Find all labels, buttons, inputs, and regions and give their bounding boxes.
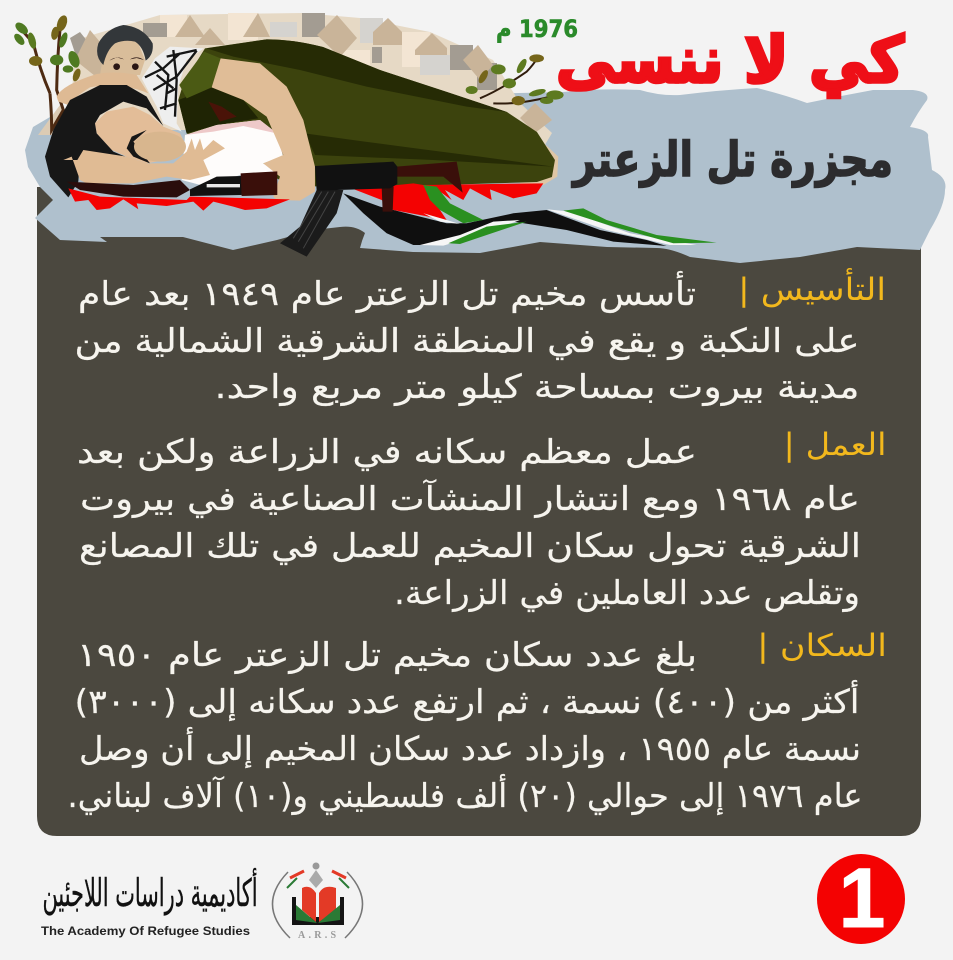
page number badge: 1 [839,851,885,945]
logo: ARS emblem [272,862,363,941]
illustration: flag white upper [547,209,697,245]
logo: ARS emblem: A.R.S [298,930,336,941]
illustration: blood on shirt [208,102,237,122]
illustration: keffiyeh [142,47,204,132]
illustration: rifle grip [382,187,394,212]
illustration: woman's dark skirt [67,180,190,197]
illustration: woman's face [95,107,185,163]
illustration: dress [182,120,283,187]
text block: work line 2: عام ١٩٦٨ ومع انتشار المنشآت الصناعية في بيروت [80,479,860,518]
text block: population line 4: عام ١٩٧٦ إلى حوالي (٢٠) ألف فلسطيني و(١٠) آلاف لبناني. [68,774,862,816]
illustration: flag white lower [420,213,520,246]
panel: dark content background [37,187,921,836]
section: founding [74,268,886,406]
illustration: dress pink collar [185,120,283,157]
page number badge [817,851,905,945]
section: population [68,628,887,816]
illustration: rifle wood guard [241,171,277,196]
illustration: man's face [100,37,145,75]
illustration: man's arm [57,73,148,105]
illustration: man's hair [97,25,153,65]
illustration: flag green lower [448,222,527,244]
subtitle: Tel al-Zaatar massacre: مجزرة تل الزعتر [571,132,893,188]
illustration: keffiyeh pattern [145,50,197,117]
text block: population line 2: أكثر من (٤٠٠) نسمة ، ثم ارتفع عدد سكانه إلى (٣٠٠٠) [74,680,860,722]
illustration: green fighter body [178,39,555,187]
text block: work line 1: عمل معظم سكانه في الزراعة ولكن بعد [77,432,697,471]
illustration: tan fringe behind body [520,130,558,185]
section: work [77,427,886,613]
text block: work line 4: وتقلص عدد العاملين في الزراعة. [394,573,860,613]
heading: work: العمل | [784,427,886,463]
text block: founding line 2: على النكبة و يقع في المنطقة الشرقية الشمالية من [74,321,860,360]
illustration: flag and rifle [280,162,717,257]
illustration: veil strand by face [127,130,150,163]
text block: population line 3: نسمة عام ١٩٥٥ ، وازداد عدد سكان المخيم إلى أن وصل [79,727,861,769]
text block: founding line 3: مدينة بيروت بمساحة كيلو متر مربع واحد. [214,367,860,406]
illustration: woman's hair [45,85,163,197]
illustration: rifle barrel [190,176,242,196]
illustration: sleeve [179,52,221,98]
illustration: rifle receiver [315,162,397,191]
title: never forget: كي لا ننسى [556,24,905,98]
illustration: blood main [352,183,447,220]
illustration: blood right [423,183,543,200]
heading: founding: التأسيس | [738,268,886,308]
illustration: left olive tree [12,14,82,130]
text block: work line 3: الشرقية تحول سكان المخيم للعمل في تلك المصانع [79,526,861,565]
logo: academy English name: The Academy Of Refugee Studies [41,926,250,938]
text block: founding line 1: تأسس مخيم تل الزعتر عام ١٩٤٩ بعد عام [78,271,696,313]
illustration: rifle magazine [280,190,343,257]
date: 1976: 1976 م [496,15,578,43]
logo: academy calligraphy: أكاديمية دراسات اللاجئين [42,868,258,916]
illustration: woman's arm and hand [63,138,225,183]
text block: population line 1: بلغ عدد سكان مخيم تل الزعتر عام ١٩٥٠ [77,635,697,674]
illustration: flag black ribbon [343,193,667,246]
panel: blue torn header shape [25,88,945,263]
illustration: fighter's arm [212,58,315,201]
illustration: baby head [134,132,186,162]
illustration: village buildings [38,13,552,170]
illustration: man's eyes [109,57,144,70]
heading: population: السكان | [757,628,887,664]
illustration: right olive branch [466,54,564,105]
illustration: figures [45,25,558,211]
illustration: dark under sleeve [178,87,258,133]
illustration: rifle stock [397,162,463,193]
illustration: flag green [423,185,483,223]
illustration: flag green upper [563,208,717,243]
illustration: blood pool left [68,188,290,211]
illustration: dark body shading [207,39,553,167]
